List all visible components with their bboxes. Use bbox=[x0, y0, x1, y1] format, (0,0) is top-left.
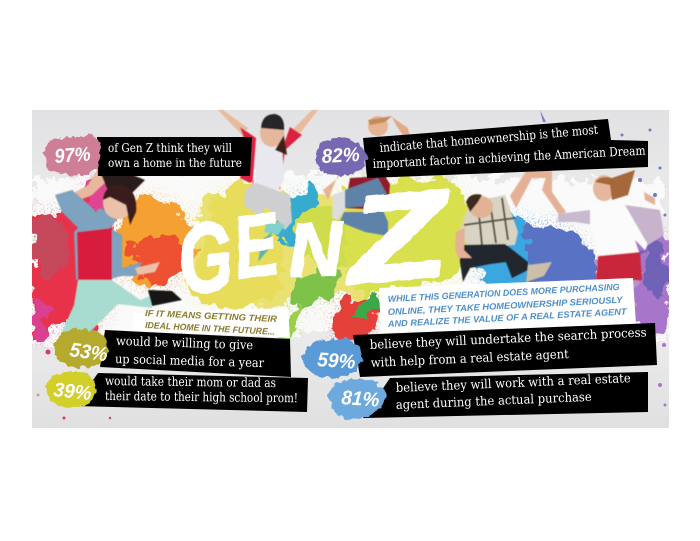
callout box: purchasing note: WHILE THIS GENERATION DOES MORE PURCHASING bbox=[388, 282, 620, 304]
stat: 53 percent: would be willing to give bbox=[116, 333, 253, 352]
paint splatters bbox=[30, 177, 669, 345]
stat: 53 percent: 53% bbox=[68, 339, 109, 366]
stat: 81 percent: 81% bbox=[341, 387, 380, 412]
GEN Z title: G bbox=[173, 200, 238, 315]
stat: 39 percent: 39% bbox=[52, 379, 93, 405]
GEN Z title bbox=[173, 164, 458, 315]
stat: 53 percent: up social media for a year bbox=[115, 351, 264, 370]
stat: 97 percent: own a home in the future bbox=[108, 155, 242, 170]
stat: 81 percent: agent during the actual purchase bbox=[395, 389, 592, 412]
GEN Z title: Z bbox=[338, 164, 458, 309]
callout box: ideal home note: IF IT MEANS GETTING THEIR bbox=[145, 308, 278, 324]
white spray behind paint bbox=[32, 170, 669, 345]
stat: 82 percent bbox=[315, 119, 648, 178]
person: boy in plaid shirt bbox=[455, 165, 552, 282]
stat: 81 percent: believe they will work with a real estate bbox=[395, 370, 631, 395]
small paint drops bbox=[36, 110, 666, 420]
stat: 82 percent: 82% bbox=[321, 144, 360, 168]
stat: 97 percent: of Gen Z think they will bbox=[108, 140, 232, 155]
stat: 39 percent: would take their mom or dad as bbox=[105, 373, 276, 390]
callout box: ideal home note: IDEAL HOME IN THE FUTURE... bbox=[145, 320, 275, 337]
callout box: purchasing note bbox=[379, 278, 636, 333]
stat: 82 percent: indicate that homeownership is the most bbox=[379, 122, 598, 155]
callout box: ideal home note bbox=[133, 308, 290, 338]
GEN Z title: E bbox=[227, 193, 286, 298]
stat: 39 percent: their date to their high school prom! bbox=[105, 388, 298, 405]
stat: 59 percent: 59% bbox=[317, 349, 356, 374]
person: girl in white top bbox=[542, 170, 664, 280]
stat: 82 percent: important factor in achieving the American Dream bbox=[372, 143, 646, 171]
stat: 97 percent: 97% bbox=[54, 144, 91, 168]
stat: 97 percent bbox=[44, 134, 252, 176]
person: boy in jeans bbox=[323, 116, 410, 236]
callout box: purchasing note: AND REALIZE THE VALUE OF A REAL ESTATE AGENT bbox=[387, 306, 628, 329]
stat: 53 percent bbox=[53, 329, 291, 377]
GEN Z title: N bbox=[286, 206, 347, 294]
person: girl with black beanie bbox=[218, 110, 318, 262]
person: jumping girl in denim jacket bbox=[55, 165, 182, 338]
stat: 59 percent bbox=[302, 323, 657, 378]
stat: 81 percent bbox=[328, 370, 648, 420]
callout box: purchasing note: ONLINE, THEY TAKE HOMEOWNERSHIP SERIOUSLY bbox=[388, 295, 624, 317]
stat: 59 percent: with help from a real estate agent bbox=[370, 346, 569, 370]
background panel bbox=[32, 110, 669, 428]
stat: 59 percent: believe they will undertake the search process bbox=[369, 324, 647, 352]
stat: 39 percent bbox=[46, 371, 308, 412]
